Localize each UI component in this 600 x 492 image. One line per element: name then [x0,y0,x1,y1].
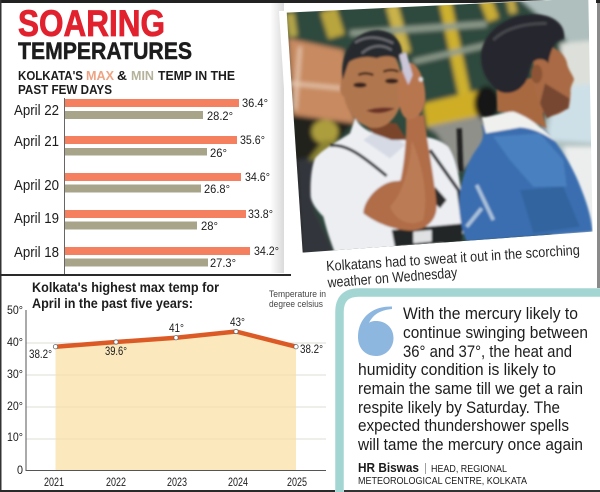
quote text: respite likely by Saturday. The [358,399,560,417]
line and area chart: highest max temp [7,280,326,489]
April 18 bars: April 18 [14,244,59,261]
icon: quotation mark [358,306,394,356]
April 22 bars: April 22 [14,102,59,119]
man one hand and phone [399,63,425,119]
temperature line [56,332,296,347]
quote text: will tame the mercury once again [357,436,583,454]
photo: polaroid frame with two men [279,0,600,292]
y axis labels [7,303,23,477]
photo caption: weather on Wednesday [326,265,459,292]
subtitle [18,68,235,97]
title [18,3,192,65]
subtitle: MIN [131,68,154,83]
y axis labels: 10° [7,430,23,444]
April 21 bars: 35.6° [240,133,265,147]
quote text: With the mercury likely to [403,305,578,323]
y axis labels: 30° [7,367,23,381]
man one hair [342,30,402,80]
bar chart: daily max and min [14,96,279,274]
x axis labels: 2022 [106,475,126,489]
April 19 bars [14,207,273,233]
April 19 bars: April 19 [14,210,59,227]
chart heading: April in the past five years: [32,296,193,311]
photo image [280,0,600,260]
y axis labels: 20° [7,399,23,413]
quote text: humidity condition is likely to [358,361,556,379]
April 18 bars [14,244,279,270]
axes [26,310,326,470]
attribution: HEAD, REGIONAL [431,463,507,475]
April 21 bars [14,133,265,160]
y axis labels: 0 [17,463,23,477]
photo caption [326,243,580,292]
y axis labels: 40° [7,335,23,349]
April 22 bars [14,96,268,123]
man one arm [363,115,437,231]
man two collar [482,112,556,142]
April 18 bars: 27.3° [210,256,236,270]
title: SOARING [18,3,165,44]
April 18 bars: 34.2° [254,244,279,258]
subtitle: MAX [86,68,114,83]
man two neck [497,73,547,128]
attribution: METEOROLOGICAL CENTRE, KOLKATA [358,475,527,487]
data labels: 38.2° [300,342,323,356]
man one neck [366,122,408,142]
April 19 bars: 28° [201,219,218,233]
April 22 bars: 36.4° [242,96,268,110]
x axis labels: 2023 [167,475,187,489]
unit note: degree celsius [269,299,323,310]
April 20 bars: 34.6° [245,170,270,184]
x axis labels: 2021 [44,475,64,489]
man two hair [481,14,564,93]
subtitle: TEMP IN THE [158,68,235,83]
subtitle: PAST FEW DAYS [18,82,112,97]
quote text [357,305,588,454]
attribution [358,460,527,487]
data labels [29,315,323,361]
man two shirt [459,125,593,242]
x axis labels: 2025 [287,475,307,489]
title: TEMPERATURES [18,38,192,65]
unit note [269,289,326,310]
subtitle: & [117,68,127,83]
April 19 bars: 33.8° [248,207,273,221]
unit note: Temperature in [269,289,326,300]
data labels: 43° [230,315,245,329]
chart heading [32,280,220,311]
subtitle: KOLKATA'S [18,68,83,83]
man one head [340,51,402,128]
data points [53,329,298,349]
x axis labels [44,475,307,489]
quote text: continue swinging between [403,324,588,342]
man one shirt [311,118,463,253]
April 22 bars: 28.2° [207,109,233,123]
April 20 bars: April 20 [14,177,59,194]
April 21 bars: 26° [210,146,227,160]
data labels: 38.2° [29,347,52,361]
quote text: 36° and 37°, the heat and [403,343,572,361]
April 20 bars: 26.8° [204,182,230,196]
April 21 bars: April 21 [14,133,59,150]
y axis labels: 50° [7,303,23,317]
quote text: remain the same till we get a rain [358,380,583,398]
attribution: HR Biswas [358,460,419,475]
April 20 bars [14,170,270,196]
x axis labels: 2024 [228,475,248,489]
quote text: expected thundershower spells [358,417,569,435]
quote panel [340,292,600,492]
man two head [533,45,574,116]
gridlines [26,343,326,439]
data labels: 39.6° [105,344,127,358]
area fill [56,332,296,470]
data labels: 41° [169,321,184,335]
chart heading: Kolkata's highest max temp for [32,280,220,295]
